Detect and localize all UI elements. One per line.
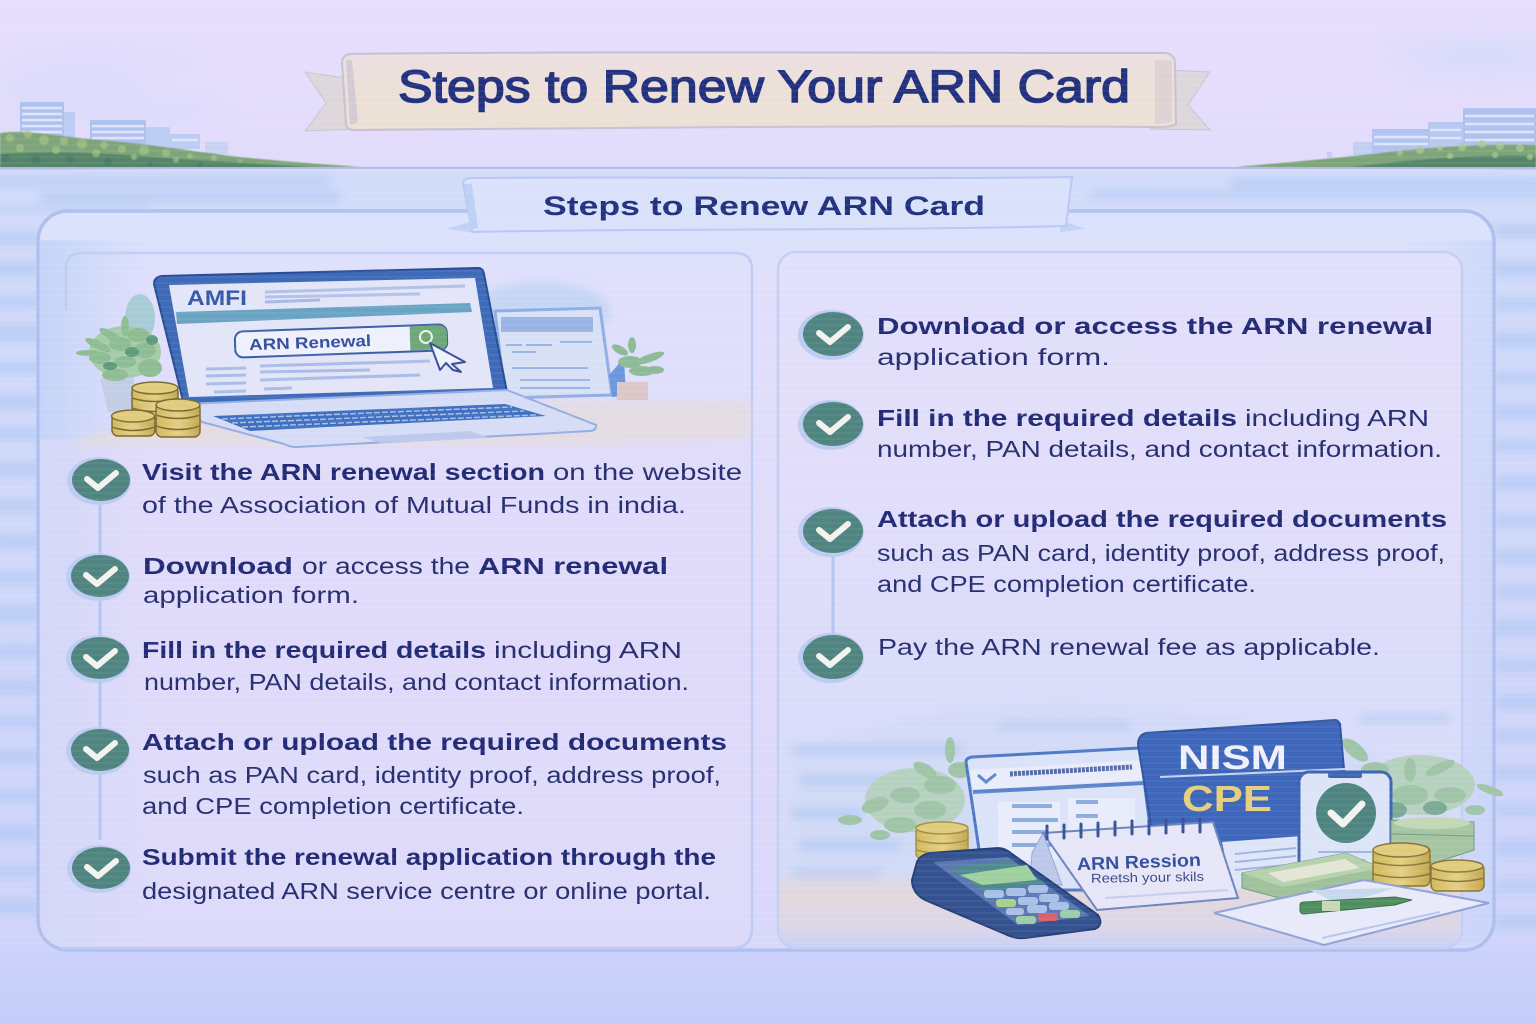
subtitle: Steps to Renew ARN Card [543, 191, 985, 221]
button: ARN Renewal: ARN Renewal [249, 333, 371, 354]
step 3 [798, 506, 1447, 597]
book text: NISM: NISM [1178, 739, 1287, 777]
step text [877, 506, 1447, 597]
browser window [966, 748, 1158, 890]
step text: and CPE completion certificate. [877, 571, 1256, 597]
step text: of the Association of Mutual Funds in india. [142, 492, 686, 518]
step text [142, 729, 727, 819]
step text: Download or access the ARN renewal [877, 313, 1433, 339]
step text: Fill in the required details [142, 637, 486, 663]
step 3 [66, 635, 689, 695]
skyline left [20, 102, 228, 154]
subtitle ribbon [445, 177, 1086, 232]
second monitor [495, 308, 612, 398]
panel: right steps [778, 252, 1505, 948]
title ribbon [305, 52, 1210, 131]
book [1138, 720, 1352, 880]
step 4 [798, 633, 1380, 683]
coins [112, 382, 200, 437]
desk calendar [1030, 819, 1238, 910]
title: Steps to Renew Your ARN Card [398, 61, 1130, 112]
desk calendar: Reetsh your skils [1091, 869, 1205, 886]
check icon [66, 635, 130, 683]
bottom strip [0, 952, 1536, 1024]
step text: and CPE completion certificate. [142, 793, 524, 819]
skyline right [1327, 108, 1536, 158]
button: ARN Renewal [235, 324, 447, 358]
phone check [1316, 783, 1376, 843]
connector line [98, 500, 102, 840]
step text: number, PAN details, and contact information. [877, 436, 1442, 462]
illustration: NISM CPE renewal desk [780, 703, 1505, 946]
phone [1299, 772, 1391, 884]
laptop base [186, 390, 596, 447]
step 1 [67, 457, 742, 518]
calendar text: ARN Ression [1077, 850, 1201, 874]
step text: Pay the ARN renewal fee as applicable. [878, 634, 1380, 660]
hazy hill [470, 282, 610, 342]
plant left [76, 316, 162, 412]
connector line [832, 555, 834, 635]
coins right [1373, 843, 1484, 891]
step text: Attach or upload the required documents [142, 729, 727, 755]
step text: application form. [877, 344, 1110, 370]
step text: application form. [143, 582, 359, 608]
step text [877, 313, 1433, 370]
step text: Fill in the required details [877, 405, 1237, 431]
table [70, 400, 750, 445]
step text [142, 844, 716, 904]
trees right [1236, 140, 1536, 169]
cash stacks [1242, 817, 1474, 899]
check icon [798, 400, 864, 450]
horizon line [0, 167, 1536, 169]
check icon [798, 633, 864, 683]
check icon [798, 507, 864, 557]
step text [142, 459, 742, 518]
step text: including ARN [1245, 405, 1429, 431]
step text: Submit the renewal application through the [142, 844, 716, 870]
step text: on the website [553, 459, 742, 485]
step text: including ARN [494, 637, 682, 663]
book text: CPE: CPE [1182, 778, 1272, 819]
step 2 [798, 400, 1442, 462]
step 5 [67, 844, 716, 904]
trees left [0, 130, 362, 169]
check icon [66, 553, 130, 601]
cursor [430, 343, 465, 372]
step text: ARN renewal [478, 553, 668, 579]
check icon [67, 457, 131, 505]
step 2 [66, 553, 668, 608]
laptop logo text: AMFI [187, 287, 247, 310]
coins left [916, 822, 968, 859]
step text [877, 405, 1442, 462]
step text: number, PAN details, and contact information. [144, 669, 689, 695]
step text [143, 553, 668, 608]
laptop lid [154, 268, 507, 405]
step 4 [66, 727, 727, 819]
page lines [206, 361, 430, 392]
plant right [609, 337, 665, 400]
step text [142, 637, 689, 695]
illustration: laptop on AMFI website [70, 268, 750, 447]
check icon [798, 310, 864, 360]
foliage left [838, 737, 972, 840]
step text: or access the [302, 553, 470, 579]
panel: left steps [40, 253, 752, 948]
hills and water streaks [780, 703, 1460, 946]
step 1 [798, 310, 1433, 370]
step text: Download [143, 553, 293, 579]
step text: such as PAN card, identity proof, address proof, [877, 540, 1445, 566]
document and pen [1214, 880, 1489, 945]
check icon [66, 727, 130, 775]
foliage right [1338, 734, 1505, 818]
step text: Visit the ARN renewal section [142, 459, 545, 485]
card terminal [912, 848, 1100, 938]
check icon [67, 845, 131, 893]
step text: designated ARN service centre or online portal. [142, 878, 711, 904]
step text: such as PAN card, identity proof, address proof, [143, 762, 721, 788]
outer panel [38, 211, 1494, 950]
step text: Attach or upload the required documents [877, 506, 1447, 532]
